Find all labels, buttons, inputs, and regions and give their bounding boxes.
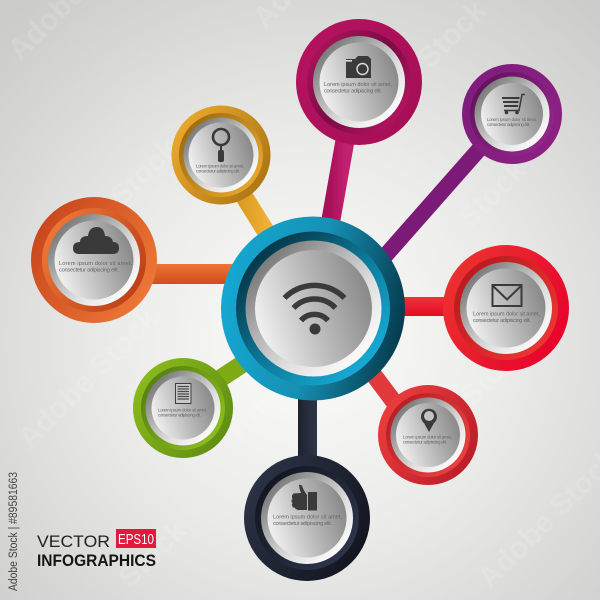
central hub: wifi [221,216,405,400]
node: mail [443,245,569,371]
text: document: consectetur adipiscing elit. [158,412,201,418]
node: document [133,358,233,458]
watermark pattern: Adobe Stock [32,132,185,285]
text: search: Lorem ipsum dolor sit amet, [196,164,244,168]
text: cloud: Lorem ipsum dolor sit amet, [59,261,132,267]
node: search [172,106,270,204]
icon: camera [346,56,371,78]
node: cloud [31,197,157,323]
text: pin: consectetur adipiscing elit. [403,440,447,444]
connector: cart to hub [378,137,490,264]
node: cart [462,64,562,164]
text: cart: Lorem ipsum dolor sit amet, [487,117,537,122]
watermark pattern: Adobe Stock [12,302,165,455]
text: pin: Lorem ipsum dolor sit amet, [403,434,452,440]
icon: thumbs up [292,484,317,510]
icon: envelope [492,285,522,306]
badge: eps10: EPS10 [118,532,154,548]
icon: cart [502,94,525,114]
connector: search to hub [240,190,270,238]
text: cloud: consectetur adipiscing elit. [59,268,119,274]
icon: map pin [421,409,437,432]
watermark pattern: Adobe Stock [382,332,535,485]
text: thumbs up: consectetur adipiscing elit. [273,521,332,527]
stock id label: Adobe Stock | #89581663 [8,472,20,591]
text: camera: Lorem ipsum dolor sit amet, [324,82,392,88]
connector: pin to hub [370,370,400,410]
text: cart: consectetur adipiscing elit. [487,122,530,127]
text: mail: consectetur adipiscing elit. [473,318,531,324]
icon: document [176,384,191,404]
connector: camera to hub [330,135,346,225]
node: pin [378,385,478,485]
watermark pattern: Adobe Stock [222,292,375,445]
connector: thumb to hub [298,390,317,462]
logo word: infographics: INFOGRAPHICS [37,552,156,570]
icon: wifi [284,285,344,334]
connector: cloud to hub [150,264,235,284]
icon: magnifier [213,129,229,162]
text: search: consectetur adipiscing elit. [196,168,240,174]
node: thumbs up [244,455,370,581]
connectors [150,135,490,462]
connector: document to hub [212,359,250,384]
node: camera [296,19,422,145]
text: thumbs up: Lorem ipsum dolor sit amet, [273,514,342,520]
watermark pattern: Stock [112,514,193,595]
logo: vector infographics [37,529,156,570]
logo word: vector: VECTOR [37,532,110,551]
text: camera: consectetur adipiscing elit. [324,88,382,94]
connector: mail to hub [395,297,450,316]
text: document: Lorem ipsum dolor sit amet, [158,408,207,412]
text: mail: Lorem ipsum dolor sit amet, [473,312,540,318]
icon: cloud [73,227,119,254]
watermark pattern: Stock [452,154,533,235]
